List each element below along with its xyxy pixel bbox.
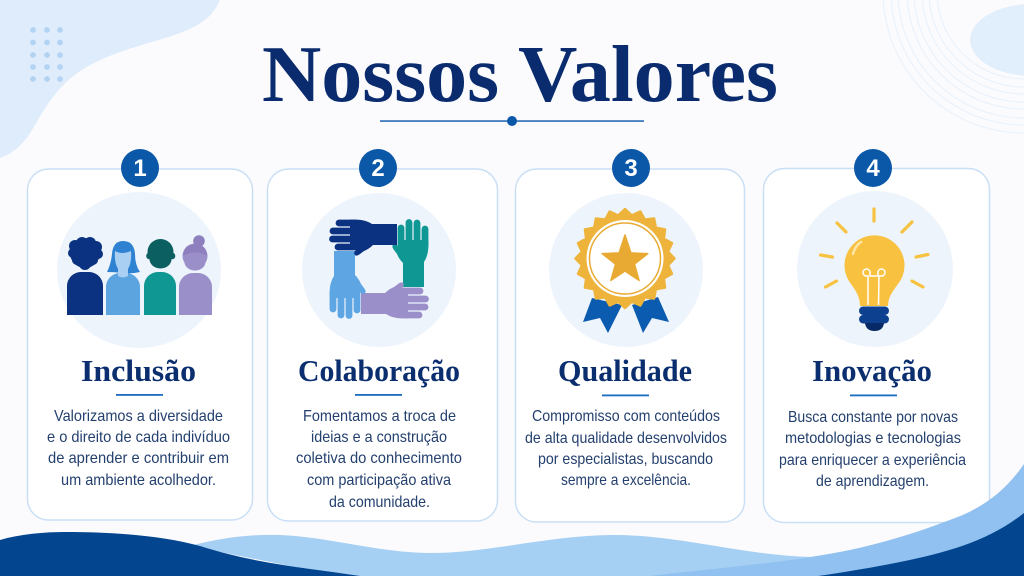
text: Inclusão description: [47, 408, 230, 489]
hand: dark blue: [332, 220, 397, 256]
panel: Qualidade: [516, 149, 744, 522]
text: Inclusão description: de aprender e contribuir em: [48, 450, 229, 467]
text: Qualidade description: [525, 408, 727, 489]
title: Nossos Valores: [262, 31, 778, 119]
text: Inovação description: de aprendizagem.: [816, 473, 929, 490]
text: Qualidade description: Compromisso com conteúdos: [532, 408, 720, 425]
text: Inovação description: para enriquecer a experiência: [779, 452, 966, 469]
number badge 3: [612, 149, 650, 187]
text: Qualidade description: sempre a excelência.: [561, 472, 691, 489]
hand: light blue: [330, 251, 366, 316]
heading: Inclusão: Inclusão: [81, 353, 196, 388]
panel: Colaboração: [268, 149, 498, 521]
number badge 4: 4: [866, 155, 880, 182]
number badge 4: [854, 149, 892, 187]
text: Qualidade description: por especialistas, buscando: [538, 451, 713, 468]
text: Inclusão description: e o direito de cada indivíduo: [47, 429, 230, 446]
background blob: top left: [0, 0, 220, 158]
text: Qualidade description: de alta qualidade desenvolvidos: [525, 430, 727, 447]
heading: Inovação: Inovação: [812, 353, 932, 388]
text: Colaboração description: [296, 408, 462, 511]
heading: Qualidade: Qualidade: [558, 353, 692, 388]
hand: teal: [392, 222, 428, 287]
text: Colaboração description: coletiva do conhecimento: [296, 450, 462, 467]
number badge 1: 1: [133, 155, 147, 182]
number badge 1: [121, 149, 159, 187]
text: Colaboração description: com participação ativa: [307, 472, 451, 489]
icon: group of people: [57, 192, 221, 348]
waves: bottom: [0, 464, 1024, 576]
number badge 2: [359, 149, 397, 187]
text: Inovação description: Busca constante por novas: [788, 409, 958, 426]
icon: four hands: [302, 193, 456, 347]
panel: Inovação: [764, 149, 990, 522]
title divider: [380, 116, 644, 126]
hand: purple: [361, 282, 426, 318]
text: Colaboração description: da comunidade.: [329, 494, 430, 511]
icon: light bulb: [797, 191, 953, 347]
text: Colaboração description: ideias e a construção: [311, 429, 447, 446]
heading: Colaboração: Colaboração: [298, 353, 460, 388]
icon: award medal: [549, 193, 703, 347]
text: Colaboração description: Fomentamos a troca de: [303, 408, 456, 425]
text: Inovação description: [779, 409, 966, 490]
number badge 2: 2: [371, 155, 385, 182]
text: Inovação description: metodologias e tecnologias: [785, 430, 961, 447]
text: Inclusão description: um ambiente acolhedor.: [61, 472, 216, 489]
background blob: top right: [970, 4, 1024, 76]
panel: Inclusão: [28, 149, 252, 520]
concentric arcs decoration: top right: [883, 0, 1024, 133]
number badge 3: 3: [624, 155, 638, 182]
text: Inclusão description: Valorizamos a diversidade: [54, 408, 223, 425]
dot grid decoration: [30, 27, 63, 82]
